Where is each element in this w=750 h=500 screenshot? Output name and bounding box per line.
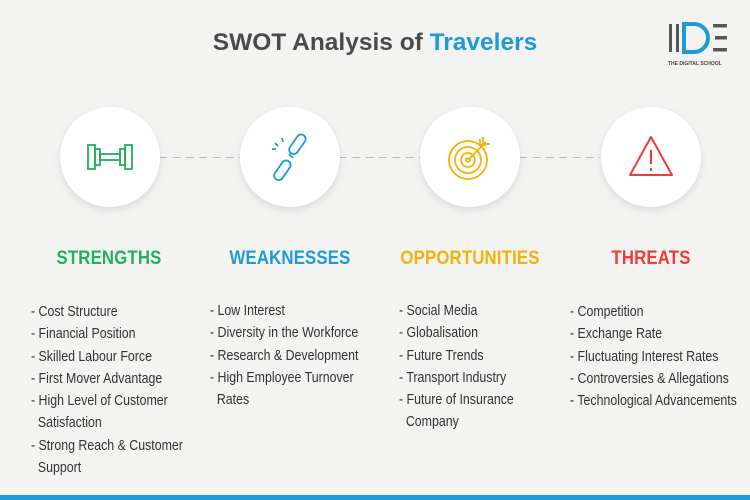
heading: threats: THREATS xyxy=(611,247,691,269)
list: strengths xyxy=(31,304,183,476)
list: threats: - Fluctuating Interest Rates xyxy=(570,349,718,365)
heading: weaknesses: WEAKNESSES xyxy=(229,247,350,269)
list: opportunities: - Social Media xyxy=(399,303,477,319)
list: strengths: - First Mover Advantage xyxy=(31,371,162,387)
list: opportunities: - Globalisation xyxy=(399,325,478,341)
list: opportunities: - Transport Industry xyxy=(399,370,506,386)
list: opportunities: - Future Trends xyxy=(399,348,484,364)
icon: target xyxy=(420,107,520,207)
list: strengths: - Skilled Labour Force xyxy=(31,349,152,365)
list: threats xyxy=(570,304,737,409)
list: strengths: - Financial Position xyxy=(31,326,135,342)
list: threats: - Controversies & Allegations xyxy=(570,371,729,387)
list: threats: - Competition xyxy=(570,304,644,320)
icon: dumbbell xyxy=(60,107,160,207)
list: weaknesses: Rates xyxy=(217,392,249,408)
list: strengths: - High Level of Customer xyxy=(31,393,168,409)
list: opportunities: - Future of Insurance xyxy=(399,392,514,408)
list: strengths: - Strong Reach & Customer xyxy=(31,438,183,454)
list: opportunities: Company xyxy=(406,414,459,430)
list: opportunities xyxy=(399,303,514,430)
icon: broken chain xyxy=(240,107,340,207)
list: weaknesses: - High Employee Turnover xyxy=(210,370,354,386)
list: strengths: Satisfaction xyxy=(38,415,102,431)
bottom bar xyxy=(0,495,750,500)
logo xyxy=(668,22,727,67)
list: weaknesses: - Research & Development xyxy=(210,348,358,364)
title: SWOT Analysis of Travelers xyxy=(213,29,537,56)
list: weaknesses: - Low Interest xyxy=(210,303,285,319)
heading: opportunities: OPPORTUNITIES xyxy=(400,247,540,269)
list: strengths: - Cost Structure xyxy=(31,304,118,320)
list: threats: - Exchange Rate xyxy=(570,326,662,342)
list: weaknesses: - Diversity in the Workforce xyxy=(210,325,358,341)
list: weaknesses xyxy=(210,303,358,408)
heading: strengths: STRENGTHS xyxy=(57,247,161,269)
list: strengths: Support xyxy=(38,460,81,476)
list: threats: - Technological Advancements xyxy=(570,393,737,409)
icon: warning xyxy=(601,107,701,207)
logo: THE DIGITAL SCHOOL xyxy=(668,61,722,67)
